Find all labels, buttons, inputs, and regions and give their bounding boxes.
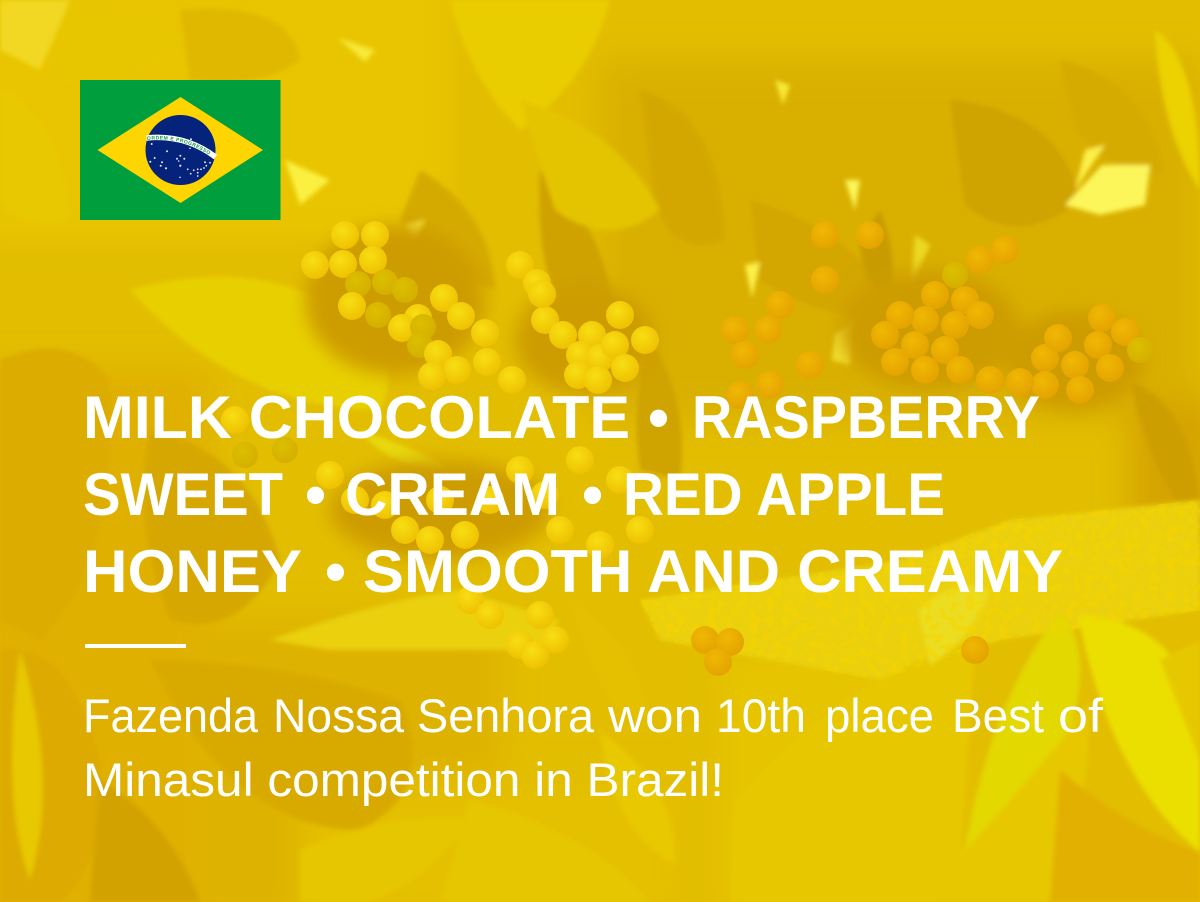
description text: Best bbox=[952, 689, 1044, 742]
dark foliage leaves bbox=[539, 170, 612, 320]
heading: flavor notes: SWEET bbox=[83, 461, 283, 528]
coffee berry clusters bbox=[221, 221, 1153, 676]
bright gaps in foliage bbox=[1065, 165, 1150, 215]
heading: flavor notes: • bbox=[305, 461, 326, 528]
heading: flavor notes: SMOOTH AND CREAMY bbox=[363, 538, 1063, 605]
description text bbox=[83, 689, 1104, 806]
flag of Brazil bbox=[80, 80, 280, 220]
heading: flavor notes bbox=[83, 384, 1063, 605]
heading: flavor notes: CREAM bbox=[345, 461, 560, 528]
description text: Minasul competition in Brazil! bbox=[83, 753, 724, 806]
heading: flavor notes: HONEY bbox=[83, 538, 302, 605]
heading: flavor notes: • bbox=[648, 384, 669, 451]
heading: flavor notes: • bbox=[325, 538, 346, 605]
heading: flavor notes: RASPBERRY bbox=[692, 384, 1040, 451]
description text: 10th bbox=[716, 689, 806, 742]
ground patches bbox=[270, 590, 560, 650]
heading: flavor notes: RED APPLE bbox=[623, 461, 945, 528]
heading: flavor notes: • bbox=[582, 461, 603, 528]
divider rule bbox=[85, 644, 186, 648]
shadow behind berry clusters bbox=[305, 225, 1145, 560]
description text: won bbox=[607, 689, 702, 742]
bottom right leaves bbox=[730, 640, 1090, 902]
heading: flavor notes: MILK CHOCOLATE bbox=[83, 384, 630, 451]
description text: Senhora bbox=[417, 689, 595, 742]
description text: of bbox=[1058, 689, 1104, 742]
description text: place bbox=[825, 689, 934, 742]
flag of Brazil: ORDEM E PROGRESSO bbox=[147, 136, 210, 154]
light leaves bbox=[130, 277, 388, 410]
ground speckle texture bbox=[640, 500, 1200, 680]
description text: Fazenda bbox=[83, 689, 259, 742]
description text: Nossa bbox=[273, 689, 405, 742]
